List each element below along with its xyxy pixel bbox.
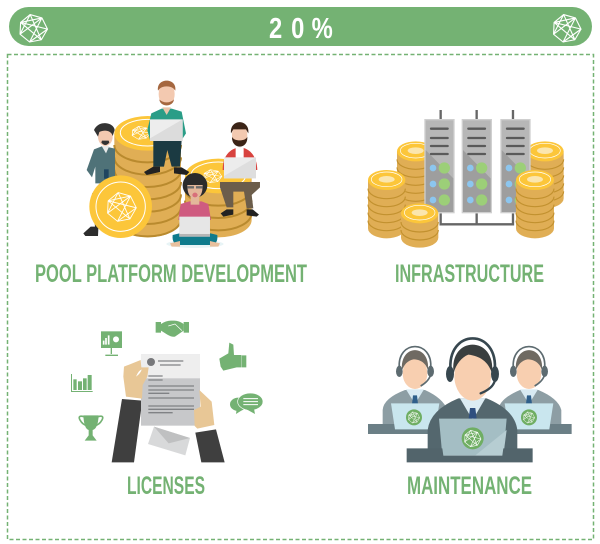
left man bbox=[83, 123, 115, 236]
illustration: maintenance bbox=[368, 338, 572, 462]
big coin stack bbox=[114, 116, 181, 237]
icon: bar chart bbox=[71, 374, 93, 392]
envelope bbox=[148, 427, 190, 455]
illustration: pool platform development bbox=[83, 81, 260, 248]
icon: speech bubbles bbox=[230, 393, 263, 414]
icon: presentation board bbox=[101, 331, 122, 355]
hand: right bbox=[194, 390, 214, 429]
agent: right bbox=[498, 347, 561, 429]
sleeve: left bbox=[112, 399, 142, 462]
label: licenses: LICENSES bbox=[127, 472, 205, 500]
icon: handshake bbox=[156, 321, 189, 337]
percentage heading: 20% bbox=[269, 12, 333, 45]
document bbox=[141, 354, 200, 426]
back coin stacks bbox=[397, 141, 564, 208]
icon: right network gem bbox=[554, 15, 581, 42]
icon: trophy bbox=[79, 415, 103, 441]
medium coin stack bbox=[185, 159, 252, 237]
woman with laptop bbox=[166, 173, 224, 248]
server racks bbox=[424, 119, 531, 213]
illustration: licenses bbox=[71, 321, 263, 462]
top man bbox=[144, 81, 189, 175]
desk: back bbox=[368, 424, 572, 434]
server cables bbox=[441, 110, 513, 224]
illustration: infrastructure bbox=[368, 110, 564, 248]
hand: left bbox=[123, 360, 149, 399]
sleeve: right bbox=[195, 429, 225, 462]
front coin bbox=[89, 175, 152, 238]
desk: front bbox=[407, 448, 533, 462]
icon: thumbs up bbox=[219, 343, 246, 371]
label: pool platform development: POOL PLATFORM DEVELOPMENT bbox=[35, 260, 307, 288]
icon: left network gem bbox=[20, 15, 48, 42]
right man bbox=[220, 122, 260, 217]
agent: front bbox=[428, 338, 517, 456]
agent: left bbox=[383, 347, 447, 429]
label: maintenance: MAINTENANCE bbox=[407, 472, 532, 500]
front coin stacks bbox=[368, 170, 554, 248]
header bar bbox=[9, 7, 592, 46]
